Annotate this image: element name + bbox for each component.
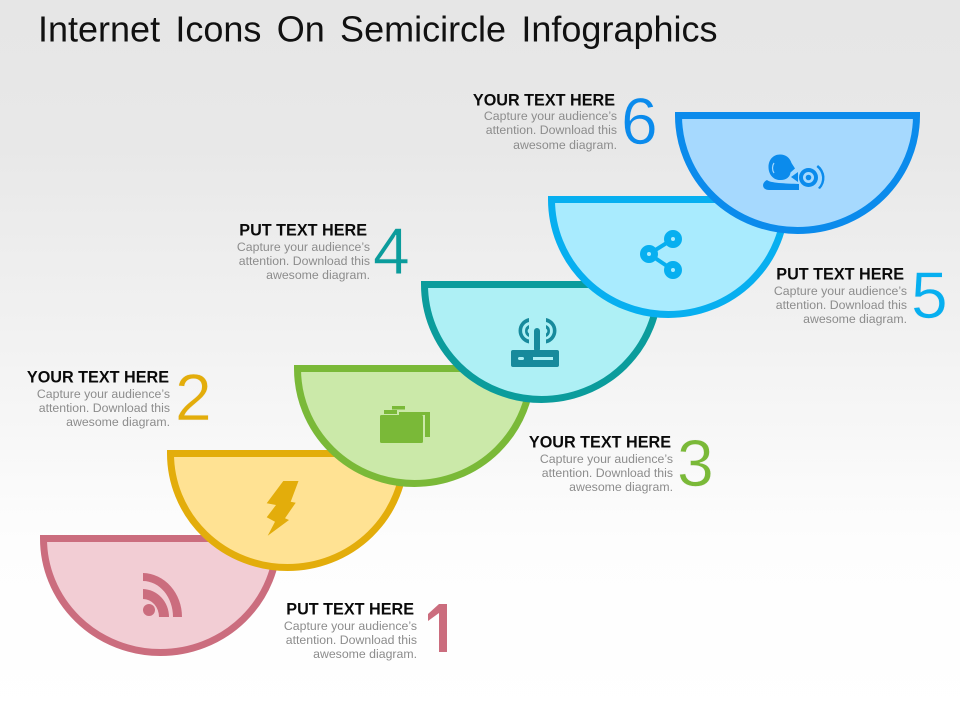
icon: share xyxy=(644,234,678,276)
body 4: Capture your audience’s xyxy=(237,240,370,254)
body 6: awesome diagram. xyxy=(513,138,617,152)
semicircle 5: sky blue xyxy=(552,200,786,314)
text block 3 xyxy=(529,426,714,500)
body 3 xyxy=(540,452,673,494)
icon: rss feed xyxy=(143,573,182,617)
heading 5: PUT TEXT HERE xyxy=(776,266,904,284)
body 2: Capture your audience’s xyxy=(37,387,170,401)
body 3: attention. Download this xyxy=(542,466,673,480)
body 5: Capture your audience’s xyxy=(774,284,907,298)
body 1: awesome diagram. xyxy=(313,647,417,661)
number 1: 1 xyxy=(423,592,460,666)
semicircle 1: pink xyxy=(44,538,278,652)
body 4 xyxy=(237,240,370,282)
body 1 xyxy=(284,619,417,661)
body 3: awesome diagram. xyxy=(569,480,673,494)
heading 4: PUT TEXT HERE xyxy=(239,222,367,240)
text block 2 xyxy=(27,360,212,434)
body 6: Capture your audience’s xyxy=(484,109,617,123)
heading 1: PUT TEXT HERE xyxy=(286,600,414,618)
body 4: attention. Download this xyxy=(239,254,370,268)
number 2: 2 xyxy=(175,360,212,434)
title: Internet Icons On Semicircle Infographics xyxy=(38,8,718,50)
icon: wifi router xyxy=(511,318,559,367)
icon: lightning bolt xyxy=(267,481,298,536)
semicircle 6: blue xyxy=(678,116,917,230)
number 6: 6 xyxy=(621,84,658,158)
body 2: awesome diagram. xyxy=(66,415,170,429)
heading 2: YOUR TEXT HERE xyxy=(27,368,169,386)
number 5: 5 xyxy=(911,258,948,332)
body 5: attention. Download this xyxy=(776,298,907,312)
body 3: Capture your audience’s xyxy=(540,452,673,466)
text block 1 xyxy=(284,603,447,660)
semicircle 3: green xyxy=(298,368,532,483)
body 4: awesome diagram. xyxy=(266,268,370,282)
text block 6 xyxy=(473,84,658,158)
body 2: attention. Download this xyxy=(39,401,170,415)
body 6: attention. Download this xyxy=(486,123,617,137)
heading 6: YOUR TEXT HERE xyxy=(473,92,615,110)
number 4: 4 xyxy=(373,214,410,288)
body 5: awesome diagram. xyxy=(803,312,907,326)
heading 3: YOUR TEXT HERE xyxy=(529,434,671,452)
body 2 xyxy=(37,387,170,429)
icon: person speaking with sound xyxy=(763,154,825,190)
text block 5 xyxy=(774,258,948,332)
body 1: attention. Download this xyxy=(286,633,417,647)
number 3: 3 xyxy=(677,426,714,500)
body 5 xyxy=(774,284,907,326)
semicircle 2: yellow xyxy=(170,454,405,568)
semicircle 4: teal xyxy=(424,284,658,400)
icon: folders xyxy=(380,406,430,443)
number 1 xyxy=(428,604,447,652)
body 1: Capture your audience’s xyxy=(284,619,417,633)
body 6 xyxy=(484,109,617,152)
text block 4 xyxy=(237,214,410,288)
